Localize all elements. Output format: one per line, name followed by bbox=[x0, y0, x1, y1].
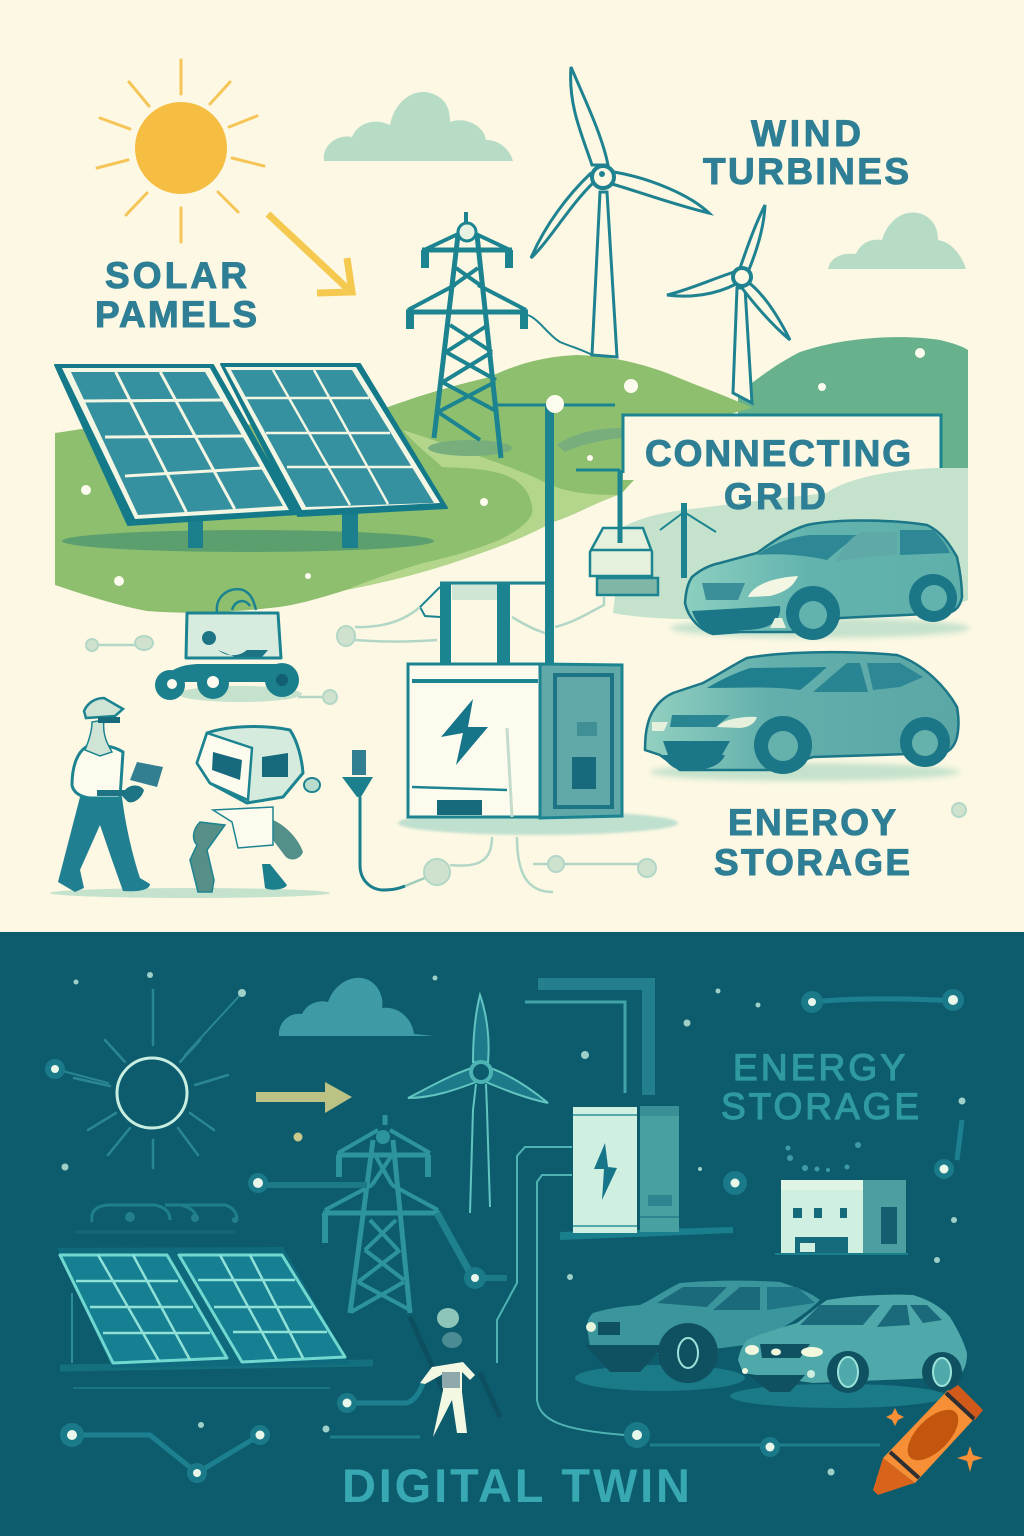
heading: energy storage twin bbox=[721, 1047, 919, 1127]
solar panel array bbox=[55, 364, 447, 552]
figure: digital twin person bbox=[420, 1308, 475, 1437]
battery storage unit bbox=[398, 583, 678, 835]
crayon end cap bbox=[947, 1385, 983, 1420]
landscape: main green hill bbox=[55, 355, 752, 613]
figure: worker with tablet bbox=[58, 698, 163, 892]
battery front face bbox=[408, 664, 540, 817]
power lines and pole bbox=[497, 395, 620, 663]
battery storage twin bbox=[560, 1106, 733, 1240]
icon: cloud small bbox=[828, 212, 966, 269]
icon: plug and cable bbox=[342, 750, 405, 890]
heading: wind turbines bbox=[703, 113, 909, 192]
icon: transmission tower bbox=[406, 212, 592, 458]
panel ground shadow bbox=[62, 530, 434, 552]
light green backdrop bbox=[613, 468, 968, 619]
heading: wind turbines: WIND bbox=[751, 113, 861, 154]
small turbine behind car bbox=[660, 503, 716, 578]
sign: connecting grid bbox=[613, 415, 968, 619]
heading: energy storage twin: STORAGE bbox=[721, 1086, 919, 1127]
crayon tip bbox=[873, 1458, 915, 1495]
wind turbine large bbox=[531, 67, 709, 357]
landscape: winding light path bbox=[346, 430, 618, 590]
heading: energy storage top bbox=[714, 802, 910, 883]
pipe line bbox=[525, 1002, 625, 1093]
icon: orange crayon bbox=[873, 1385, 983, 1495]
heading: energy storage top: STORAGE bbox=[714, 842, 910, 883]
heading: digital twin: DIGITAL TWIN bbox=[342, 1459, 690, 1512]
landscape: hill shading bbox=[428, 428, 622, 456]
icon: transmission tower twin bbox=[267, 1115, 507, 1313]
solar panel left bbox=[55, 365, 298, 525]
crayon body bbox=[883, 1390, 975, 1483]
solar panel right bbox=[221, 364, 447, 516]
landscape: right hill bbox=[738, 337, 968, 470]
label: connecting grid bbox=[645, 433, 911, 517]
pipe band bbox=[538, 978, 655, 1095]
heading: energy storage top: ENEROY bbox=[728, 802, 896, 843]
icon: cloud large bbox=[324, 92, 513, 161]
panel backing bbox=[57, 1247, 350, 1368]
decorative specks on the hill bbox=[81, 348, 925, 586]
heading: solar panels: PAMELS bbox=[95, 294, 257, 335]
circuit nodes top bbox=[86, 626, 966, 885]
icon: lightning bolt bbox=[441, 699, 488, 765]
figure: walking robot bbox=[190, 727, 320, 892]
arrow: sun to panels bbox=[268, 214, 352, 293]
connector lines top bbox=[92, 597, 647, 892]
icon: sparkle small bbox=[886, 1408, 904, 1426]
icon: sun bbox=[97, 60, 264, 242]
circuit nodes twin bbox=[45, 972, 966, 1483]
arrow: twin bbox=[256, 1082, 352, 1113]
panel: physical energy system bbox=[0, 0, 1024, 932]
label: connecting grid: CONNECTING bbox=[645, 433, 911, 474]
battery side face bbox=[540, 664, 622, 818]
car upper bbox=[670, 520, 970, 640]
car lower bbox=[645, 652, 960, 781]
icon: sparkle large bbox=[957, 1446, 983, 1472]
heading: wind turbines: TURBINES bbox=[703, 151, 909, 192]
solar panel twin left bbox=[60, 1255, 227, 1363]
heading: energy storage twin: ENERGY bbox=[733, 1047, 905, 1088]
panel legs bbox=[188, 510, 358, 548]
panel: digital twin bbox=[0, 932, 1024, 1536]
car twin back bbox=[575, 1281, 820, 1391]
icon: sun twin bbox=[55, 990, 242, 1168]
solar panel array twin bbox=[57, 1205, 373, 1388]
heading: solar panels bbox=[95, 255, 257, 335]
frame on top of battery bbox=[440, 583, 545, 600]
circuit lines twin bbox=[72, 978, 962, 1473]
wind turbine small bbox=[667, 205, 790, 403]
robot rover bbox=[155, 589, 302, 702]
icon: cloud twin bbox=[279, 978, 434, 1036]
wind turbine twin bbox=[408, 995, 548, 1213]
building twin bbox=[775, 1142, 908, 1254]
solar panel twin right bbox=[179, 1255, 345, 1362]
heading: solar panels: SOLAR bbox=[105, 255, 247, 296]
car twin front bbox=[730, 1295, 967, 1408]
ground shadow under figures bbox=[50, 888, 330, 898]
small junction box bbox=[590, 510, 658, 595]
label: connecting grid: GRID bbox=[724, 476, 826, 517]
